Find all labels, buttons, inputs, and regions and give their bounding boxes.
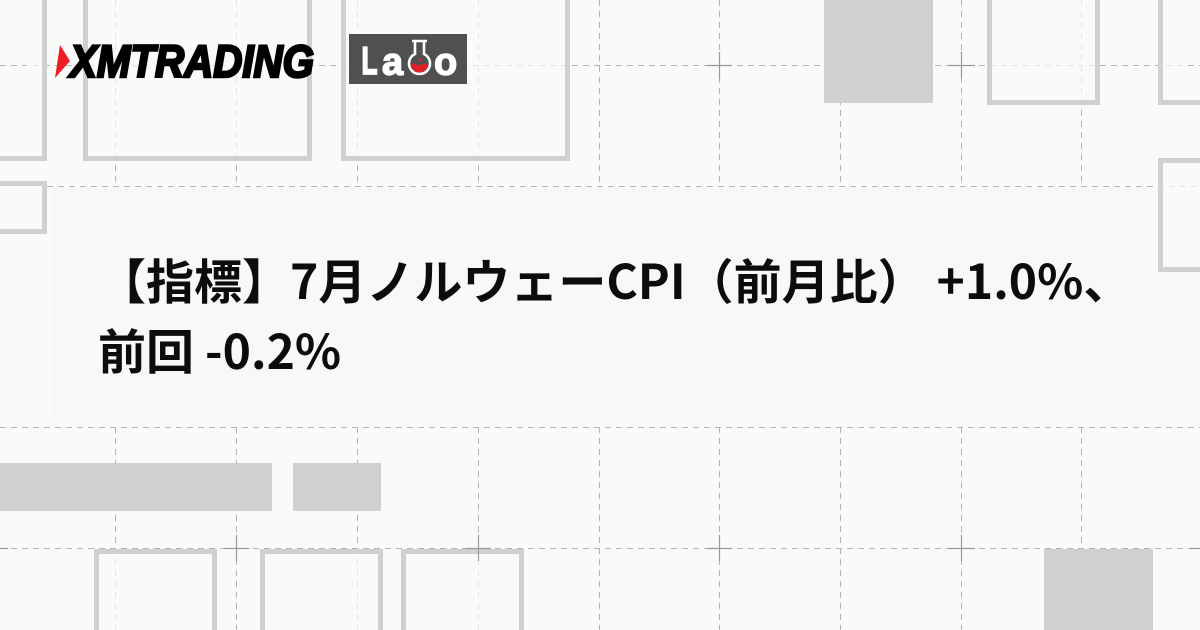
icon: flask (409, 41, 430, 74)
title: 前回 -0.2% (98, 313, 341, 383)
logo: Lab: o (434, 42, 457, 84)
title (98, 243, 1131, 383)
title: 【指標】7月ノルウェーCPI（前月比） +1.0%、 (98, 243, 1131, 313)
logo: Lab: L (362, 40, 378, 83)
title panel (52, 187, 1152, 422)
logo: Lab: a (382, 42, 404, 84)
logo: Lab (349, 34, 467, 84)
logo: XMTRADING: XMTRADING (67, 36, 314, 87)
